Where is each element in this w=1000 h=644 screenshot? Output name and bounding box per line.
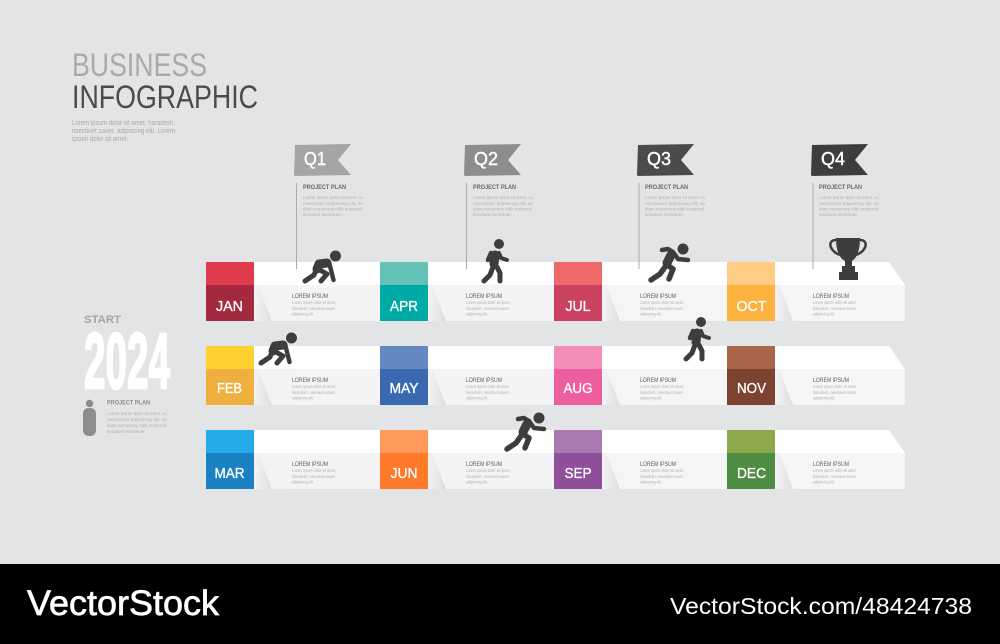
month: MAY	[380, 346, 428, 405]
quarter Q1: nsectetuer adipiscing elit, se	[303, 201, 363, 206]
text: AUG	[640, 377, 684, 400]
month: OCT: OCT	[736, 298, 766, 315]
footer bar	[0, 564, 1000, 644]
quarter Q1: Q1	[304, 149, 326, 169]
month: NOV: NOV	[737, 380, 766, 397]
month: JAN	[206, 262, 254, 321]
text: MAR: LOREM IPSUM	[292, 461, 328, 468]
text: SEP: Lorem ipsum dolor sit amet,	[640, 468, 684, 473]
icon: sprinting runner JUN	[507, 412, 544, 449]
text: OCT: Lorem ipsum dolor sit amet,	[813, 300, 857, 305]
text: OCT: LOREM IPSUM	[813, 293, 849, 300]
text: APR: LOREM IPSUM	[466, 293, 502, 300]
quarter Q4: PROJECT PLAN	[819, 185, 862, 191]
text: JUN: adipiscing elit.	[466, 480, 488, 484]
text: APR: adipiscing elit.	[466, 312, 488, 316]
text: DEC: LOREM IPSUM	[813, 461, 849, 468]
month: MAR: MAR	[214, 465, 245, 482]
month: FEB: FEB	[217, 380, 242, 397]
text: AUG: LOREM IPSUM	[640, 377, 676, 384]
quarter Q3	[637, 144, 705, 269]
text: MAR: haradesh, nsectiuet sauer	[292, 474, 335, 479]
month: JAN: JAN	[216, 298, 243, 315]
text: JUL	[640, 293, 684, 316]
text: JUN: Lorem ipsum dolor sit amet,	[466, 468, 510, 473]
text: MAR: adipiscing elit.	[292, 480, 314, 484]
text: JUN: haradesh, nsectiuet sauer	[466, 474, 509, 479]
icon: trophy	[830, 238, 866, 280]
month: DEC: DEC	[737, 465, 766, 482]
start year panel: START	[84, 314, 121, 326]
text: NOV: haradesh, nsectiuet sauer	[813, 390, 856, 395]
text: JUL: LOREM IPSUM	[640, 293, 676, 300]
text: 2024	[84, 316, 170, 405]
icon: person	[83, 400, 96, 436]
start year panel: diam nonummy nibh euismod	[107, 423, 166, 428]
text: JAN: Lorem ipsum dolor sit amet,	[292, 300, 336, 305]
text: JAN: haradesh, nsectiuet sauer	[292, 306, 335, 311]
quarter Q2: nsectetuer adipiscing elit, se	[473, 201, 533, 206]
text: FEB: haradesh, nsectiuet sauer	[292, 390, 335, 395]
month: DEC	[727, 430, 775, 489]
text: FEB: adipiscing elit.	[292, 396, 314, 400]
text: APR: Lorem ipsum dolor sit amet,	[466, 300, 510, 305]
quarter Q4	[811, 144, 879, 269]
text: AUG: adipiscing elit.	[640, 396, 662, 400]
text: SEP: LOREM IPSUM	[640, 461, 676, 468]
quarter Q1	[294, 144, 363, 269]
quarter Q4: Lorem ipsum dolor sit amet, co	[819, 195, 879, 200]
text: DEC	[813, 461, 857, 484]
title	[72, 47, 258, 115]
quarter Q3: tincidunt sectetuer.	[645, 212, 684, 217]
text: AUG: Lorem ipsum dolor sit amet,	[640, 384, 684, 389]
text: FEB	[292, 377, 336, 400]
month: JUN: JUN	[390, 465, 418, 482]
quarter Q4: Q4	[821, 149, 845, 169]
footer bar: VectorStock	[27, 584, 220, 623]
text: JUN	[466, 461, 510, 484]
text: MAY: haradesh, nsectiuet sauer	[466, 390, 509, 395]
text: JUL: haradesh, nsectiuet sauer	[640, 306, 683, 311]
month: MAY: MAY	[390, 380, 418, 397]
quarter Q2: Q2	[474, 149, 498, 169]
month: SEP	[554, 430, 602, 489]
start year panel: tincidunt sectetuer.	[107, 429, 146, 434]
text: NOV: Lorem ipsum dolor sit amet,	[813, 384, 857, 389]
quarter Q2: diam nonummy nibh euismod	[473, 206, 532, 212]
row 1 timeline band	[206, 262, 905, 321]
text: SEP: haradesh, nsectiuet sauer	[640, 474, 683, 479]
icon: crouching runner FEB	[261, 332, 297, 363]
row 3 timeline band	[206, 430, 905, 489]
text: FEB: LOREM IPSUM	[292, 377, 328, 384]
intro text: nsectiuet sauer. adipiscing elit. Lorem	[72, 128, 175, 135]
month: SEP: SEP	[564, 465, 592, 482]
text: MAY: Lorem ipsum dolor sit amet,	[466, 384, 510, 389]
text: JUL: adipiscing elit.	[640, 312, 662, 316]
text: OCT	[813, 293, 857, 316]
quarter Q1: tincidunt sectetuer.	[303, 212, 342, 217]
quarter Q3: Lorem ipsum dolor sit amet, co	[645, 195, 705, 200]
quarter Q4: diam nonummy nibh euismod	[819, 206, 878, 212]
intro text: Lorem ipsum dolor sit amet, haradesh,	[72, 120, 175, 127]
text: APR: haradesh, nsectiuet sauer	[466, 306, 509, 311]
text: OCT: adipiscing elit.	[813, 312, 835, 316]
icon: walking person AUG	[686, 317, 709, 359]
intro text	[72, 120, 175, 143]
text: AUG: haradesh, nsectiuet sauer	[640, 390, 683, 395]
start year panel: Lorem ipsum dolor sit amet, co	[107, 411, 167, 416]
quarter Q1: diam nonummy nibh euismod	[303, 206, 362, 212]
month: MAR	[206, 430, 254, 489]
text: JAN	[292, 293, 336, 316]
text: MAR	[292, 461, 336, 484]
quarter Q3: PROJECT PLAN	[645, 185, 688, 191]
text: MAY: LOREM IPSUM	[466, 377, 502, 384]
month: AUG: AUG	[564, 380, 592, 397]
text: NOV	[813, 377, 857, 400]
start year panel: PROJECT PLAN	[107, 400, 150, 406]
text: JUN: LOREM IPSUM	[466, 461, 502, 468]
text: DEC: haradesh, nsectiuet sauer	[813, 474, 856, 479]
month: JUN	[380, 430, 428, 489]
start year panel	[83, 314, 170, 436]
text: OCT: haradesh, nsectiuet sauer	[813, 306, 856, 311]
text: APR	[466, 293, 510, 316]
quarter Q2: tincidunt sectetuer.	[473, 212, 512, 217]
text: DEC: adipiscing elit.	[813, 480, 835, 484]
month: OCT	[727, 262, 775, 321]
text: JAN: LOREM IPSUM	[292, 293, 328, 300]
title: INFOGRAPHIC	[72, 79, 258, 115]
text: JAN: adipiscing elit.	[292, 312, 314, 316]
text: SEP	[640, 461, 684, 484]
text: FEB: Lorem ipsum dolor sit amet,	[292, 384, 336, 389]
text: SEP: adipiscing elit.	[640, 480, 662, 484]
month: APR: APR	[390, 298, 418, 315]
quarter Q1: PROJECT PLAN	[303, 185, 346, 191]
footer bar: VectorStock.com/48424738	[670, 593, 972, 619]
quarter Q3: diam nonummy nibh euismod	[645, 206, 704, 212]
icon: crouching runner Q1	[305, 250, 341, 281]
quarter Q3: Q3	[647, 149, 671, 169]
month: JUL: JUL	[566, 298, 590, 315]
intro text: ipsum dolor sit amet.	[72, 136, 128, 143]
month: AUG	[554, 346, 602, 405]
month: NOV	[727, 346, 775, 405]
text: NOV: LOREM IPSUM	[813, 377, 849, 384]
quarter Q3: nsectetuer adipiscing elit, se	[645, 201, 705, 206]
quarter Q4: nsectetuer adipiscing elit, se	[819, 201, 879, 206]
row 2 timeline band	[206, 346, 905, 405]
text: MAY: adipiscing elit.	[466, 396, 488, 400]
month: JUL	[554, 262, 602, 321]
quarter Q4: tincidunt sectetuer.	[819, 212, 858, 217]
title: BUSINESS	[72, 47, 207, 83]
text: MAR: Lorem ipsum dolor sit amet,	[292, 468, 336, 473]
month: APR	[380, 262, 428, 321]
text: NOV: adipiscing elit.	[813, 396, 835, 400]
icon: sprinting runner Q3	[651, 244, 688, 280]
quarter Q2	[464, 144, 533, 269]
text: MAY	[466, 377, 510, 400]
quarter Q2: Lorem ipsum dolor sit amet, co	[473, 195, 533, 200]
month: FEB	[206, 346, 254, 405]
quarter Q2: PROJECT PLAN	[473, 185, 516, 191]
text: JUL: Lorem ipsum dolor sit amet,	[640, 300, 684, 305]
quarter Q1: Lorem ipsum dolor sit amet, co	[303, 195, 363, 200]
start year panel: nsectetuer adipiscing elit, se	[107, 417, 167, 422]
icon: walking person Q2	[484, 239, 507, 281]
text: DEC: Lorem ipsum dolor sit amet,	[813, 468, 857, 473]
